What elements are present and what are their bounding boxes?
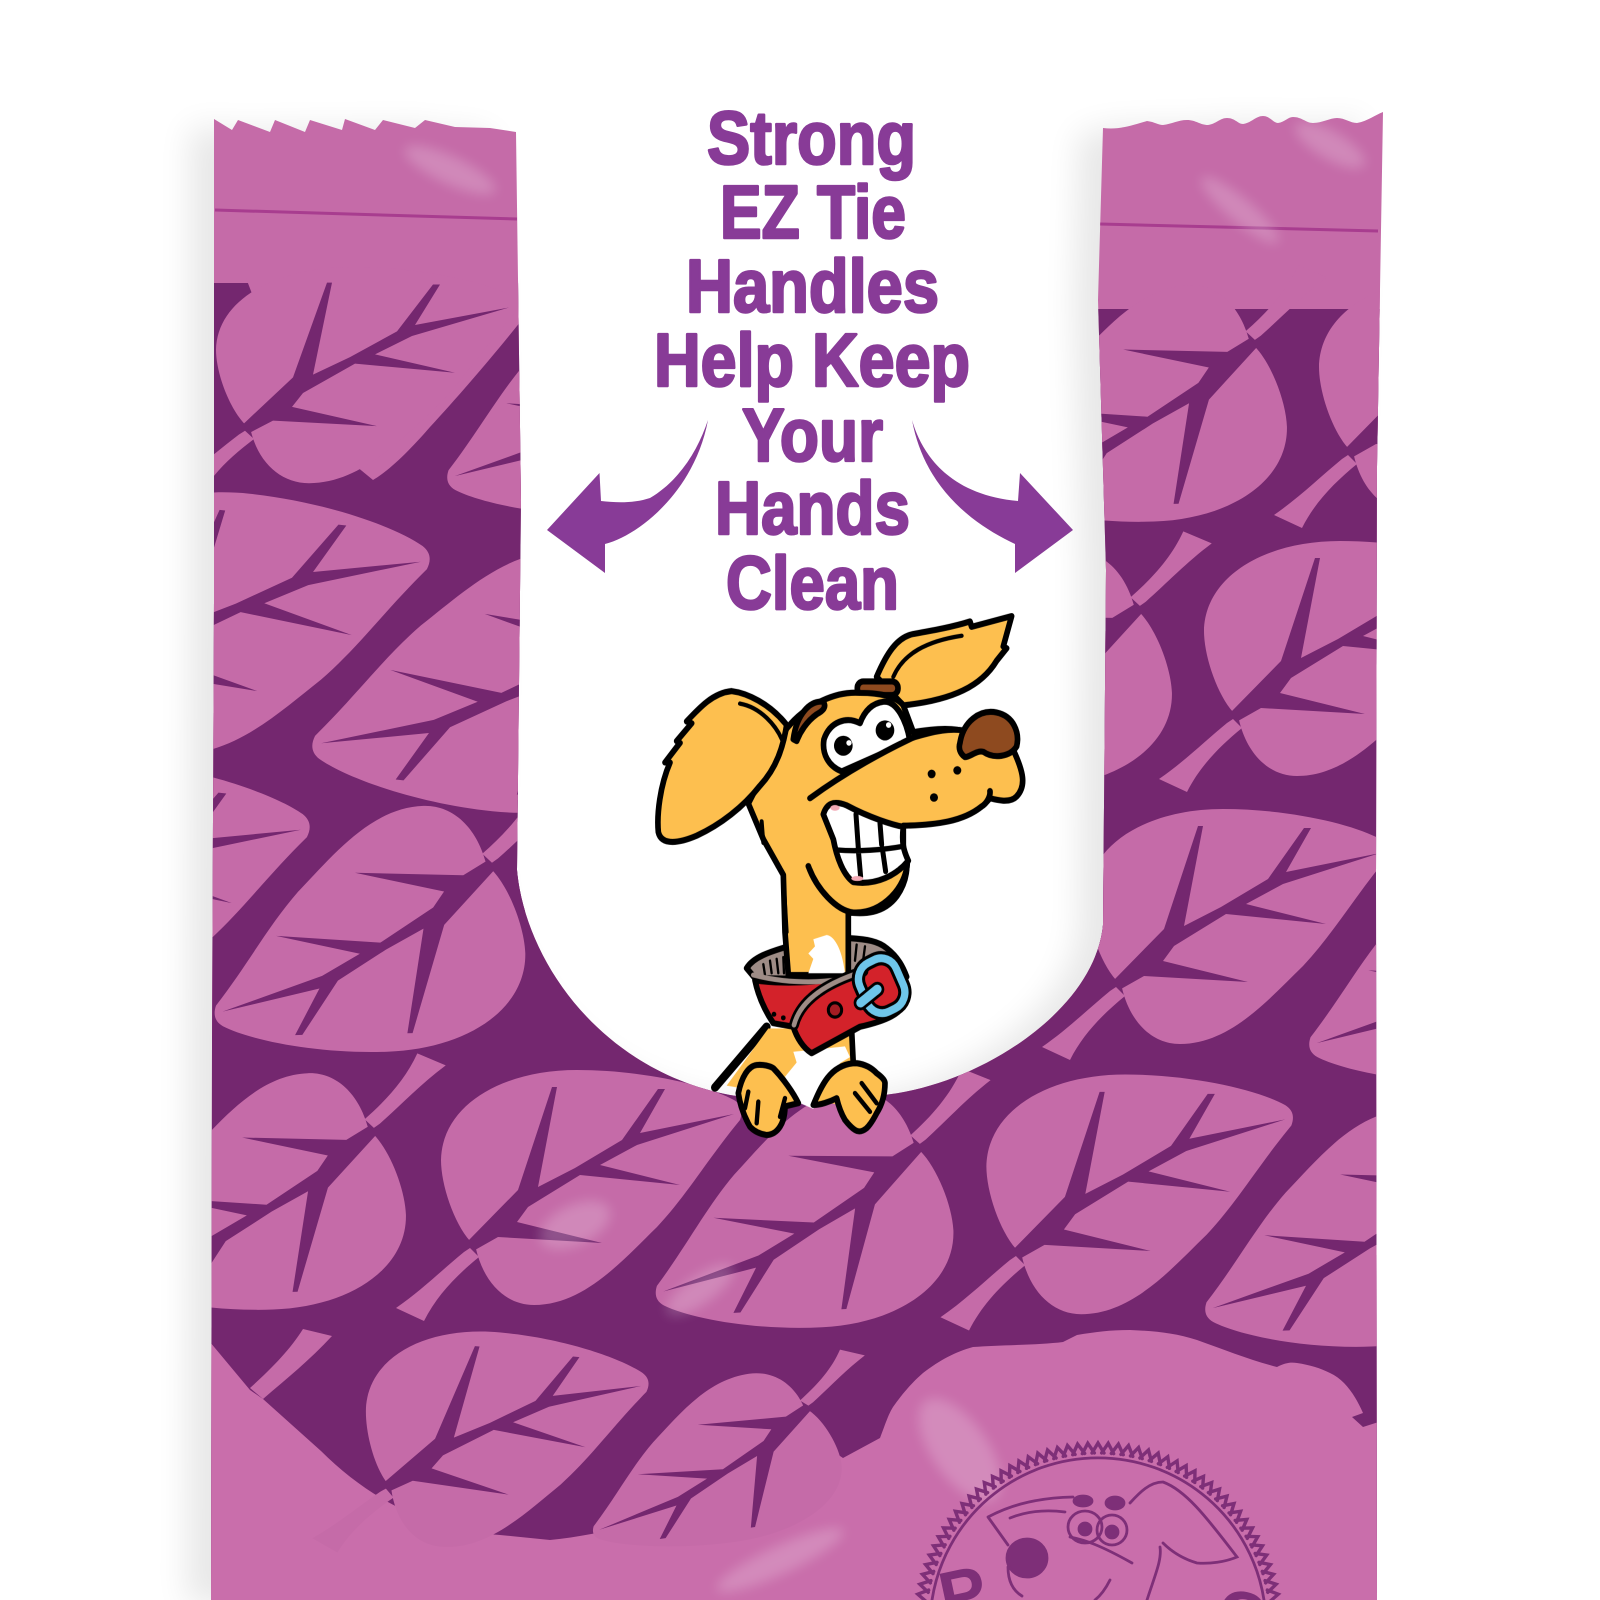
seal dog pupil right <box>1106 1526 1118 1538</box>
collar back <box>747 938 907 979</box>
seal dog ear right <box>1130 1482 1237 1563</box>
dog head and neck <box>748 693 1023 975</box>
dog right toes <box>855 1083 877 1112</box>
leaf <box>1205 1116 1377 1347</box>
leaf <box>1159 541 1377 792</box>
seal dog brow left <box>1074 1496 1092 1506</box>
leaf <box>1099 309 1290 522</box>
dog jaw line <box>903 791 990 826</box>
stitch line right <box>1100 224 1378 231</box>
seal logo printed on bag <box>917 1443 1279 1600</box>
leaf <box>1309 944 1376 1074</box>
collar strap edge <box>794 971 863 1025</box>
heading line 5: Your <box>742 393 883 477</box>
icon: cartoon dog mascot <box>658 616 1023 1135</box>
leaf <box>311 1318 652 1578</box>
dog teeth lines <box>837 814 903 877</box>
buckle tongue outline <box>861 989 877 1003</box>
dog brow left <box>793 702 825 741</box>
dog right paw <box>813 1063 885 1131</box>
leaf <box>940 1074 1293 1331</box>
leaf <box>656 1072 990 1328</box>
leaf <box>447 370 521 508</box>
buckle tongue blue <box>861 989 877 1003</box>
leaf <box>212 778 310 938</box>
bag shadow <box>187 116 1359 1600</box>
dog far ear <box>877 616 1012 705</box>
dog pupil left <box>834 736 853 756</box>
seal zigzag ring <box>917 1443 1279 1600</box>
dog nose <box>959 712 1017 757</box>
leaf <box>213 492 430 749</box>
dog highlight left <box>846 740 852 746</box>
dog highlight right <box>886 722 891 728</box>
dog ear inner line <box>893 636 962 677</box>
heading line 7: Clean <box>726 541 899 625</box>
collar hole <box>828 1003 842 1017</box>
heading line 3: Handles <box>686 244 939 328</box>
dog pupil right <box>876 720 894 740</box>
buckle outline <box>853 952 910 1019</box>
dog brow top <box>857 681 898 695</box>
dog cheek line <box>808 862 907 913</box>
leaf <box>212 1054 446 1310</box>
heading line 6: Hands <box>715 466 910 550</box>
leaf <box>1104 532 1212 775</box>
stitch line left <box>215 210 517 219</box>
dog neck white patch <box>808 935 845 973</box>
leaf <box>1042 809 1388 1060</box>
seal dog eye right <box>1097 1515 1127 1545</box>
panel: purple bag with leaf pattern <box>211 112 1383 1600</box>
seal dog brow right <box>1106 1497 1124 1509</box>
heading line 1: Strong <box>707 96 916 180</box>
light stub lower left <box>250 1329 332 1399</box>
dog belly <box>785 1046 850 1109</box>
leaf <box>214 806 526 1052</box>
dog eyes <box>824 702 910 771</box>
leaf <box>396 1070 742 1321</box>
seal dog eyes <box>1068 1511 1102 1543</box>
dog muzzle stroke <box>810 730 963 798</box>
dog mouth teeth <box>823 803 908 883</box>
heading: Strong EZ Tie Handles Help Keep Your Hands Clean <box>654 96 970 625</box>
dog gum top <box>830 805 840 811</box>
collar front red <box>755 957 907 1053</box>
arrow left <box>547 420 708 573</box>
dog left toes <box>745 1092 785 1123</box>
buckle blue <box>853 952 910 1019</box>
heading line 4: Help Keep <box>654 318 970 402</box>
dog fur spikes on neck <box>762 821 787 932</box>
dog ear fur line <box>740 704 783 743</box>
collar dots <box>772 1012 786 1020</box>
collar rim gray <box>753 975 840 982</box>
leaf <box>312 559 520 813</box>
dog near ear <box>658 691 787 842</box>
light top patch over left leaf <box>246 278 525 480</box>
seal dog muzzle lines <box>1008 1537 1160 1600</box>
leaf <box>214 282 508 484</box>
plastic highlights <box>399 113 1372 1600</box>
seal inner circle <box>932 1458 1264 1600</box>
seal dog ear left <box>988 1497 1073 1545</box>
leaf <box>1274 291 1380 528</box>
dog arm line <box>715 1027 767 1087</box>
dog whisker dots <box>928 766 961 802</box>
arrow right <box>912 420 1073 573</box>
heading line 2: EZ Tie <box>720 170 906 254</box>
dog chest <box>727 1029 853 1107</box>
collar strap gray <box>794 971 863 1025</box>
dog chest right line <box>852 1030 853 1064</box>
collar inner stripes <box>763 945 865 975</box>
leaf <box>573 1346 888 1561</box>
dog muzzle line <box>810 730 987 825</box>
dog left paw <box>738 1065 798 1135</box>
dog gum bottom <box>851 876 863 881</box>
bottom light area of bag <box>205 1330 1385 1600</box>
seal dog pupil <box>1079 1523 1091 1535</box>
seal dog nose <box>1007 1539 1047 1577</box>
